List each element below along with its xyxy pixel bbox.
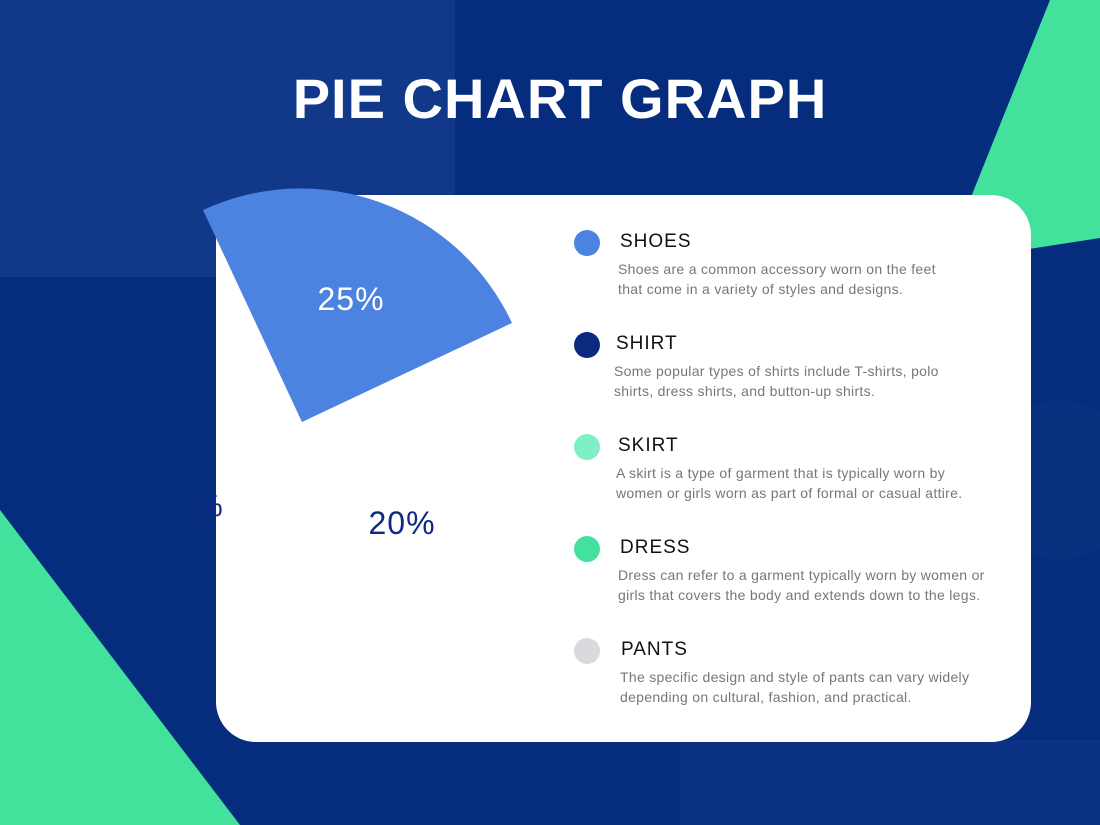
text: depending on cultural, fashion, and practical. [620, 688, 912, 704]
legend: dress [574, 536, 985, 603]
text: DRESS [620, 537, 690, 558]
text: Shoes are a common accessory worn on the feet [618, 261, 936, 277]
pie slice: shoes 25% [203, 188, 512, 422]
text: A skirt is a type of garment that is typically worn by [616, 465, 945, 481]
text: PANTS [621, 639, 688, 660]
title: PIE CHART GRAPH [293, 67, 827, 130]
label 20%: 20% [368, 505, 436, 541]
text: SHOES [620, 231, 692, 252]
text: Some popular types of shirts include T-shirts, polo [614, 363, 939, 379]
pie slice: shoes 25%: 25% [317, 281, 385, 317]
text: that come in a variety of styles and designs. [618, 280, 903, 296]
text: The specific design and style of pants can vary widely [620, 669, 969, 685]
legend: skirt [574, 434, 962, 501]
legend: shirt [574, 332, 939, 399]
card [216, 195, 1031, 742]
label partial %: % [196, 490, 223, 523]
text: shirts, dress shirts, and button-up shirts. [614, 382, 875, 398]
text: Dress can refer to a garment typically worn by women or [618, 567, 985, 583]
legend: pants [574, 638, 969, 705]
text: women or girls worn as part of formal or casual attire. [616, 484, 962, 500]
text: SKIRT [618, 435, 679, 456]
text: SHIRT [616, 333, 678, 354]
text: girls that covers the body and extends down to the legs. [618, 586, 980, 602]
legend: shoes [574, 230, 936, 297]
